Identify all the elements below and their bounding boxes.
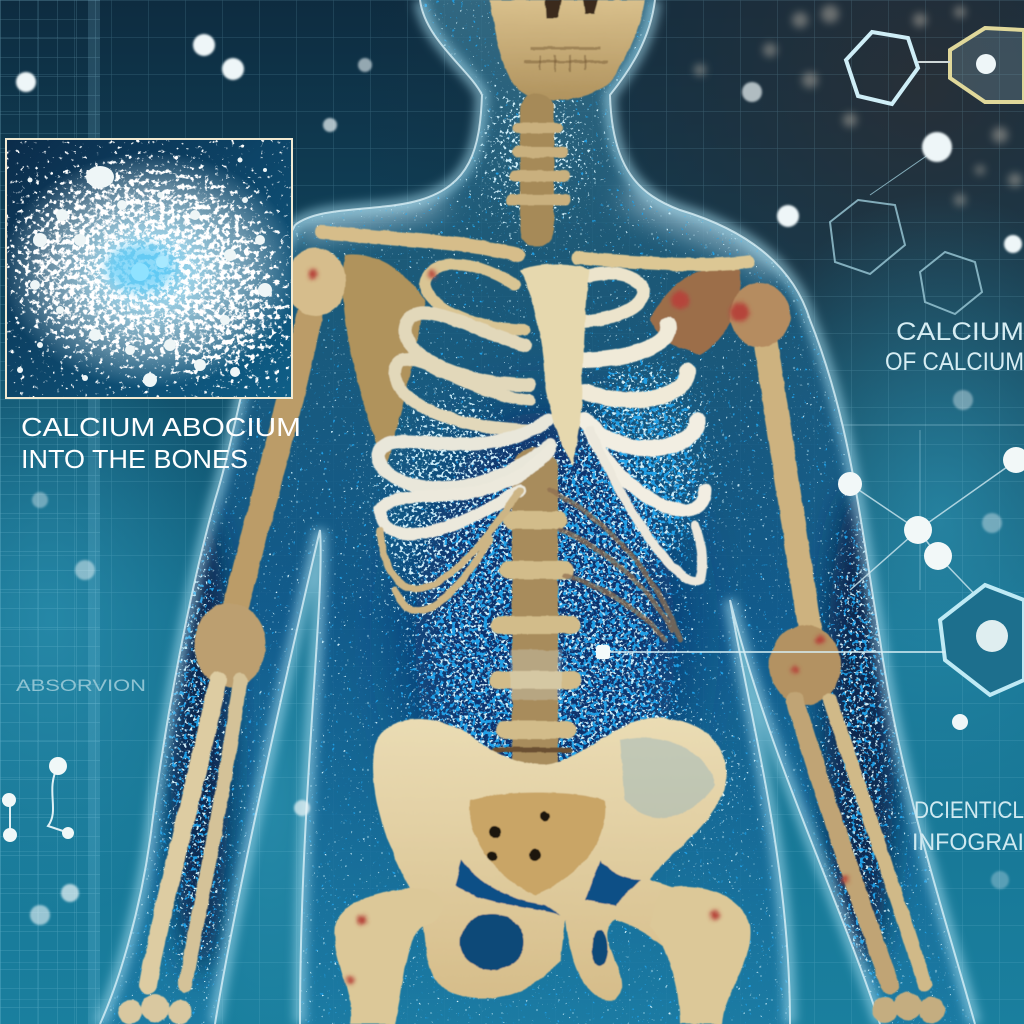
side label: calcium: CALCIUM <box>896 318 1024 346</box>
molecule: lower right network <box>838 447 1024 730</box>
callout leader line <box>596 645 945 659</box>
scapula right <box>650 268 741 355</box>
scapula left <box>343 254 425 470</box>
cervical spine <box>512 110 565 230</box>
lumbar and thoracic spine <box>495 470 572 770</box>
ribs left <box>378 264 550 611</box>
red marks <box>308 269 849 984</box>
side label: absorption: ABSORVION <box>16 676 146 695</box>
femurs <box>334 886 751 1024</box>
molecule: lower left <box>2 757 74 842</box>
molecule: faint hexagons <box>830 148 982 314</box>
molecule: top right hexagons <box>846 28 1024 104</box>
inset caption second line: INTO THE BONES <box>21 446 248 474</box>
inset caption: CALCIUM ABOCIUM <box>21 414 301 442</box>
right arm bones <box>730 283 945 1023</box>
ribs right <box>550 274 705 640</box>
pelvis <box>373 718 744 1000</box>
sternum <box>520 264 590 465</box>
inset: calcium powder <box>0 139 300 398</box>
skull <box>490 0 645 100</box>
clavicles <box>322 232 748 265</box>
left arm bones <box>118 248 346 1024</box>
